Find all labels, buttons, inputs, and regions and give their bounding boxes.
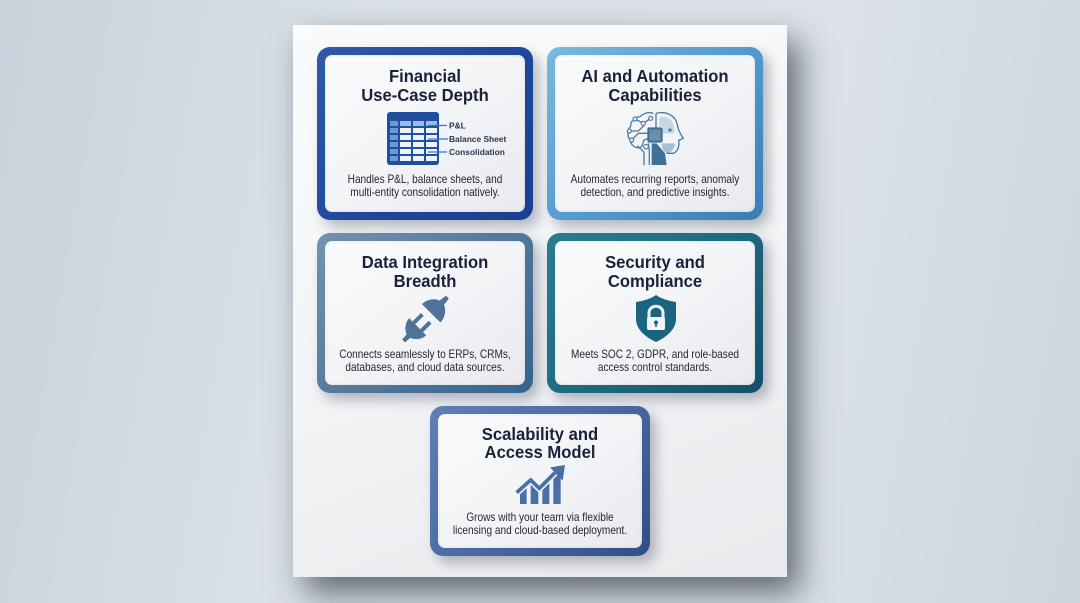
heading: Scalability and <box>482 424 598 444</box>
heading <box>361 66 489 105</box>
heading: Access Model <box>485 442 595 462</box>
panel: AI and automation capabilities <box>547 47 763 220</box>
description <box>571 347 739 374</box>
description <box>570 172 740 199</box>
description: detection, and predictive insights. <box>580 185 730 199</box>
description: access control standards. <box>598 360 712 374</box>
description: Grows with your team via flexible <box>466 510 614 524</box>
panel: security and compliance <box>547 233 763 393</box>
card body <box>325 55 525 212</box>
heading: Data Integration <box>362 252 488 272</box>
description <box>339 347 511 374</box>
card body <box>325 241 525 385</box>
heading: Breadth <box>394 271 456 291</box>
description <box>453 510 627 537</box>
description <box>348 172 502 199</box>
panel: data integration breadth <box>317 233 533 393</box>
description: multi-entity consolidation natively. <box>350 185 500 199</box>
heading: Financial <box>389 66 461 86</box>
card body <box>555 55 755 212</box>
heading <box>362 252 488 291</box>
heading: AI and Automation <box>581 66 729 86</box>
heading: Use-Case Depth <box>361 85 489 105</box>
icon: spreadsheet with labels: P&L <box>449 120 466 130</box>
heading <box>482 424 598 462</box>
description: Meets SOC 2, GDPR, and role-based <box>571 347 739 361</box>
heading: Compliance <box>608 271 702 291</box>
icon: spreadsheet with labels <box>387 112 506 165</box>
card body <box>555 241 755 385</box>
panel: financial use-case depth <box>317 47 533 220</box>
icon: spreadsheet with labels: Consolidation <box>449 147 505 157</box>
panel: scalability and access model <box>430 406 650 556</box>
description: Connects seamlessly to ERPs, CRMs, <box>339 347 511 361</box>
description: licensing and cloud-based deployment. <box>453 523 627 537</box>
heading <box>581 66 729 105</box>
heading <box>605 252 705 291</box>
description: Automates recurring reports, anomaly <box>571 172 739 186</box>
icon: growth chart <box>516 465 565 504</box>
heading: Security and <box>605 252 705 272</box>
description: databases, and cloud data sources. <box>345 360 505 374</box>
card body <box>438 414 642 548</box>
icon: plug and socket <box>402 296 449 342</box>
icon: spreadsheet with labels: Balance Sheet <box>449 134 506 144</box>
icon: AI head with chip <box>626 112 684 165</box>
icon: shield with padlock <box>636 295 676 342</box>
white page panel <box>293 25 787 577</box>
heading: Capabilities <box>608 85 702 105</box>
description: Handles P&L, balance sheets, and <box>348 172 502 186</box>
